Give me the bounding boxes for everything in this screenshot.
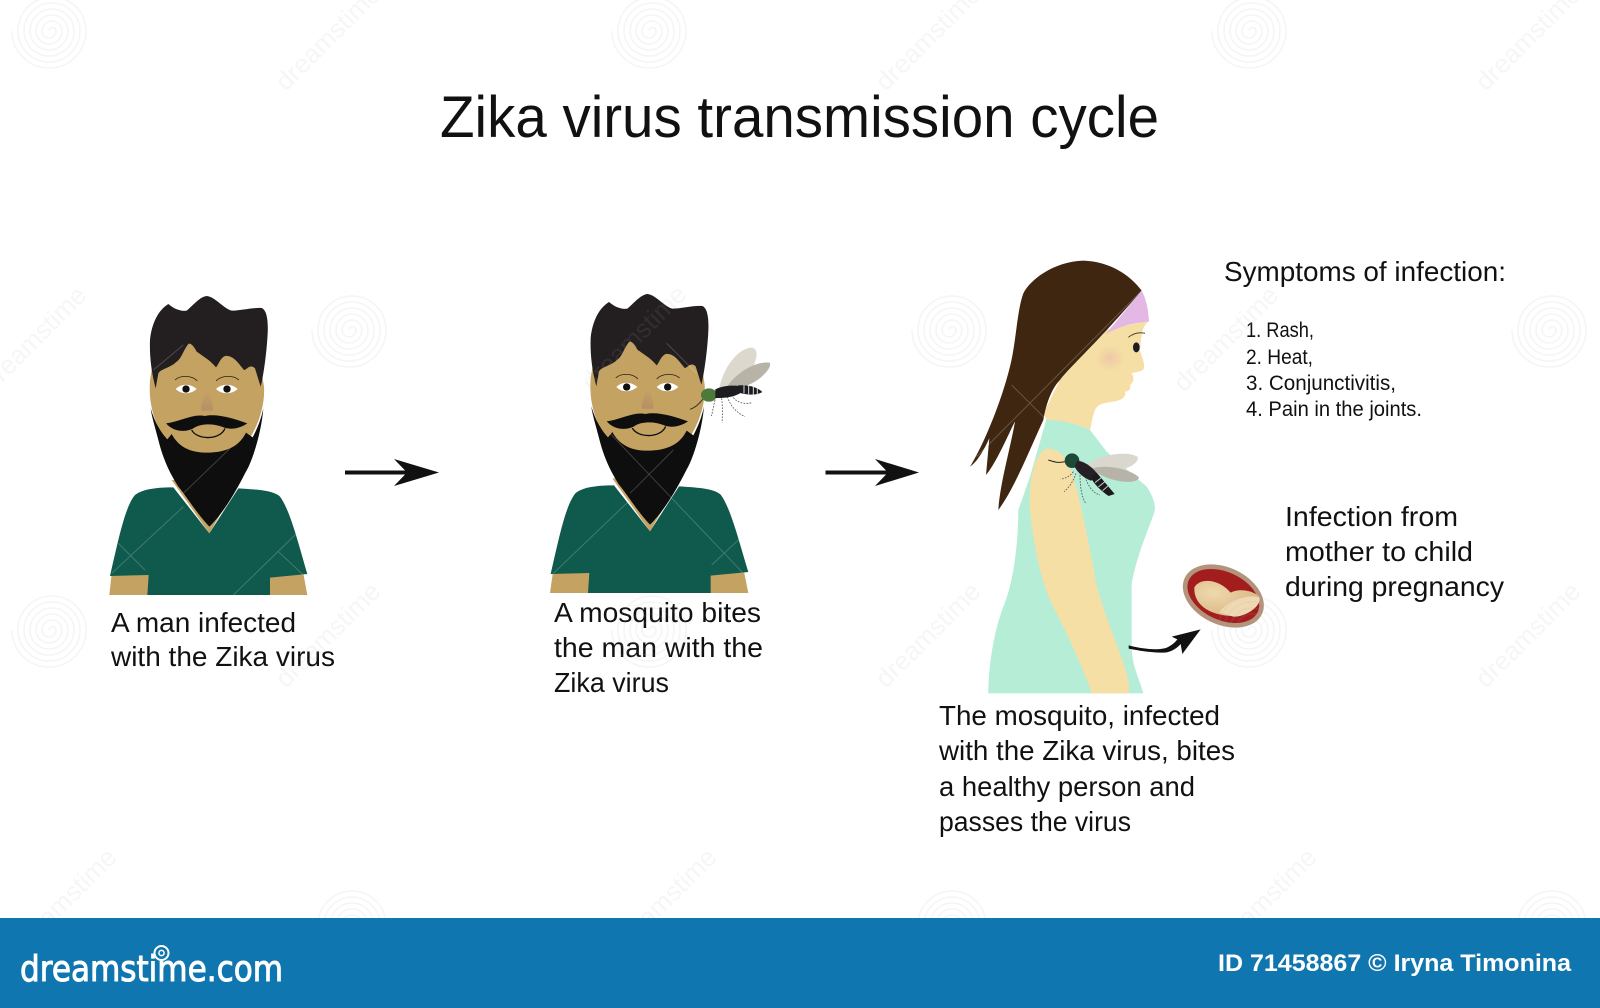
caption: man [110,607,335,672]
symptoms list: 1. Rash, [1246,319,1314,342]
man nose [642,390,654,409]
caption: man: A man infected [111,607,296,638]
caption: woman [938,700,1235,837]
symptoms list: 3. Conjunctivitis, [1246,372,1396,395]
figure: woman [970,261,1274,693]
watermark text: dreamstime [869,576,986,693]
man nose [201,392,213,411]
caption: woman: with the Zika virus, bites [938,735,1235,766]
watermark text: dreamstime [5,842,122,959]
heading: symptoms: Symptoms of infection: [1224,256,1506,287]
watermark text: dreamstime [575,279,692,396]
watermark text: dreamstime [605,842,722,959]
woman arm [1030,449,1129,693]
man mouth [632,426,666,436]
caption: woman: a healthy person and [939,771,1195,802]
caption: mosquito bites man: Zika virus [554,667,669,698]
woman head and neck [1043,321,1149,430]
woman headband [1105,291,1149,335]
arrow: mother to child [1129,629,1201,654]
man mouth [192,428,225,438]
footer logo: dreamstime.com [20,949,283,990]
watermark text: dreamstime [1167,280,1284,397]
man beard [591,406,704,525]
woman hair [970,261,1142,510]
figure: man bitten by mosquito [550,294,770,593]
icon: mosquito on woman's arm [1048,453,1139,503]
man mustache [166,415,247,431]
icon: fetus in womb [1173,552,1274,640]
arrow: mosquito bite to healthy person [826,459,919,486]
watermark text: dreamstime [269,576,386,693]
watermark text: dreamstime [1205,842,1322,959]
man beard [151,408,263,527]
man hair [591,294,708,386]
man arms [550,572,748,593]
caption: mother to child [1285,501,1504,602]
symptoms list [1246,319,1422,421]
woman cheek [1095,346,1125,371]
man mustache [607,413,688,429]
caption: mosquito bites man [554,597,763,698]
caption: mosquito bites man: A mosquito bites [554,597,761,628]
man arms [109,573,307,595]
symptoms list: 2. Heat, [1246,346,1313,369]
title: Zika virus transmission cycle [440,85,1159,150]
watermark text: dreamstime [1469,576,1586,693]
caption: mother to child: mother to child [1285,536,1473,567]
caption: mother to child: during pregnancy [1285,571,1504,602]
man neck [172,480,240,533]
caption: woman: The mosquito, infected [939,700,1220,731]
man face [150,340,264,457]
man eyes [616,374,680,391]
caption: mosquito bites man: the man with the [554,632,763,663]
man eyes [175,376,239,393]
figure: infected man [109,296,307,595]
symptoms list: 4. Pain in the joints. [1246,398,1422,421]
man face [590,338,705,455]
man shirt [551,485,748,593]
woman eye [1128,333,1145,352]
icon: mosquito on man's ear [690,348,770,423]
woman dress [988,418,1155,693]
footer credit: ID 71458867 © Iryna Timonina [1218,950,1572,977]
caption: man: with the Zika virus [110,641,335,672]
arrow: man to mosquito bite [345,459,439,486]
footer bar [0,918,1600,1008]
man shirt [110,487,307,595]
caption: mother to child: Infection from [1285,501,1458,532]
man hair [150,296,268,388]
caption: woman: passes the virus [939,806,1131,837]
man neck [612,478,681,531]
